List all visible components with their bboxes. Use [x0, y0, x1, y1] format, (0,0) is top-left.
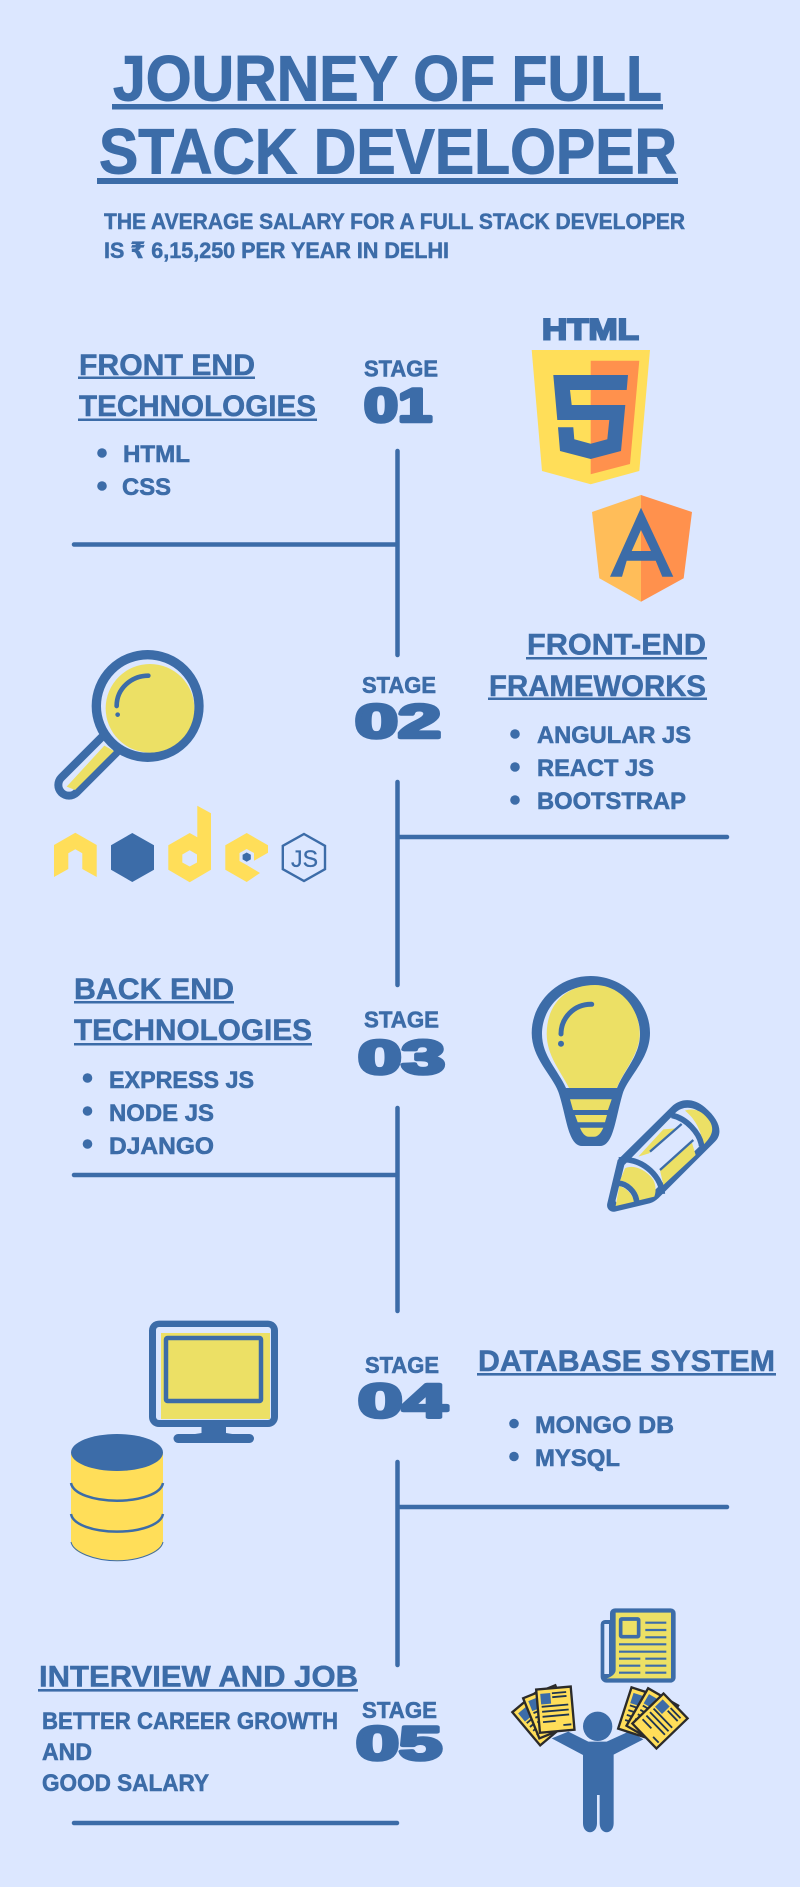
list: express, node, django: EXPRESS JS	[109, 1067, 254, 1094]
stage 03 label: STAGE	[364, 1006, 439, 1032]
list: html, css: HTML	[123, 441, 190, 468]
heading: back end technologies	[74, 973, 312, 1047]
heading: front-end frameworks: FRAMEWORKS	[489, 670, 706, 703]
panel: stage 03 back end technologies	[74, 973, 719, 1212]
list: mongo db, mysql: MYSQL	[535, 1445, 620, 1472]
stage 05 label: 05	[356, 1716, 442, 1770]
heading: front end technologies: TECHNOLOGIES	[79, 390, 316, 423]
heading: back end technologies: TECHNOLOGIES	[74, 1014, 312, 1047]
stage 02 label: STAGE	[362, 672, 436, 698]
stage 01 label: STAGE	[364, 356, 438, 382]
icon: angular logo	[592, 495, 692, 602]
list: angular, react, bootstrap: REACT JS	[537, 755, 654, 782]
list: mongo db, mysql	[509, 1412, 674, 1472]
title	[97, 42, 678, 188]
list: express, node, django: DJANGO	[109, 1133, 214, 1160]
list: angular, react, bootstrap: ANGULAR JS	[537, 722, 691, 749]
stage 03 label: 03	[358, 1030, 445, 1084]
panel: stage 05 interview and job	[38, 1608, 688, 1832]
title: STACK DEVELOPER	[99, 116, 677, 188]
icon: html5 logo	[532, 314, 650, 484]
heading: front end technologies: FRONT END	[79, 349, 255, 382]
title: JOURNEY OF FULL	[113, 42, 662, 114]
icon: light bulb	[532, 976, 650, 1146]
icon: magnifying glass	[67, 655, 199, 790]
list: angular, react, bootstrap	[510, 722, 691, 815]
text: better career growth and good salary	[42, 1708, 338, 1797]
timeline connector lines	[74, 451, 727, 1823]
list: express, node, django	[83, 1067, 254, 1160]
panel: stage 04 database system	[71, 1321, 776, 1561]
subtitle: average salary: IS ₹ 6,15,250 PER YEAR IN DELHI	[104, 238, 449, 263]
icon: html5 logo: HTML	[542, 314, 639, 346]
stage 02 label: 02	[355, 694, 441, 748]
text: better career growth and good salary: GOOD SALARY	[42, 1770, 209, 1797]
stage 02 label	[355, 672, 441, 748]
panel: stage 02 front-end frameworks	[54, 628, 707, 882]
list: mongo db, mysql: MONGO DB	[535, 1412, 674, 1439]
icon: database cylinder	[71, 1434, 163, 1561]
stage 04 label: STAGE	[365, 1352, 439, 1378]
stage 05 label: STAGE	[362, 1697, 437, 1723]
heading: interview and job: INTERVIEW AND JOB	[39, 1660, 358, 1694]
icon: monitor	[149, 1321, 278, 1443]
list: angular, react, bootstrap: BOOTSTRAP	[537, 788, 686, 815]
heading: front-end frameworks: FRONT-END	[527, 628, 706, 662]
stage 04 label	[358, 1352, 447, 1427]
stage 01 label: 01	[364, 378, 432, 432]
stage 05 label	[356, 1697, 442, 1770]
list: html, css: CSS	[122, 474, 171, 501]
list: html, css	[97, 441, 190, 501]
stage 03 label	[358, 1006, 445, 1084]
heading: front-end frameworks	[488, 628, 707, 703]
text: better career growth and good salary: BETTER CAREER GROWTH	[42, 1708, 338, 1735]
text: better career growth and good salary: AND	[42, 1739, 92, 1766]
icon: pencil	[607, 1100, 719, 1212]
stage 04 label: 04	[358, 1374, 447, 1427]
heading: front end technologies	[78, 349, 317, 423]
icon: newspaper	[601, 1608, 676, 1683]
heading: back end technologies: BACK END	[74, 973, 234, 1006]
list: express, node, django: NODE JS	[109, 1100, 214, 1127]
stage 01 label	[364, 356, 438, 432]
icon: node js logo	[54, 806, 325, 882]
heading: database system: DATABASE SYSTEM	[478, 1345, 775, 1378]
subtitle: average salary: THE AVERAGE SALARY FOR A FULL STACK DEVELOPER	[104, 209, 685, 234]
panel: stage 01 front end technologies	[78, 314, 692, 602]
subtitle: average salary	[104, 209, 685, 263]
icon: person holding resumes	[512, 1685, 688, 1832]
icon: node js logo: JS	[291, 846, 318, 873]
